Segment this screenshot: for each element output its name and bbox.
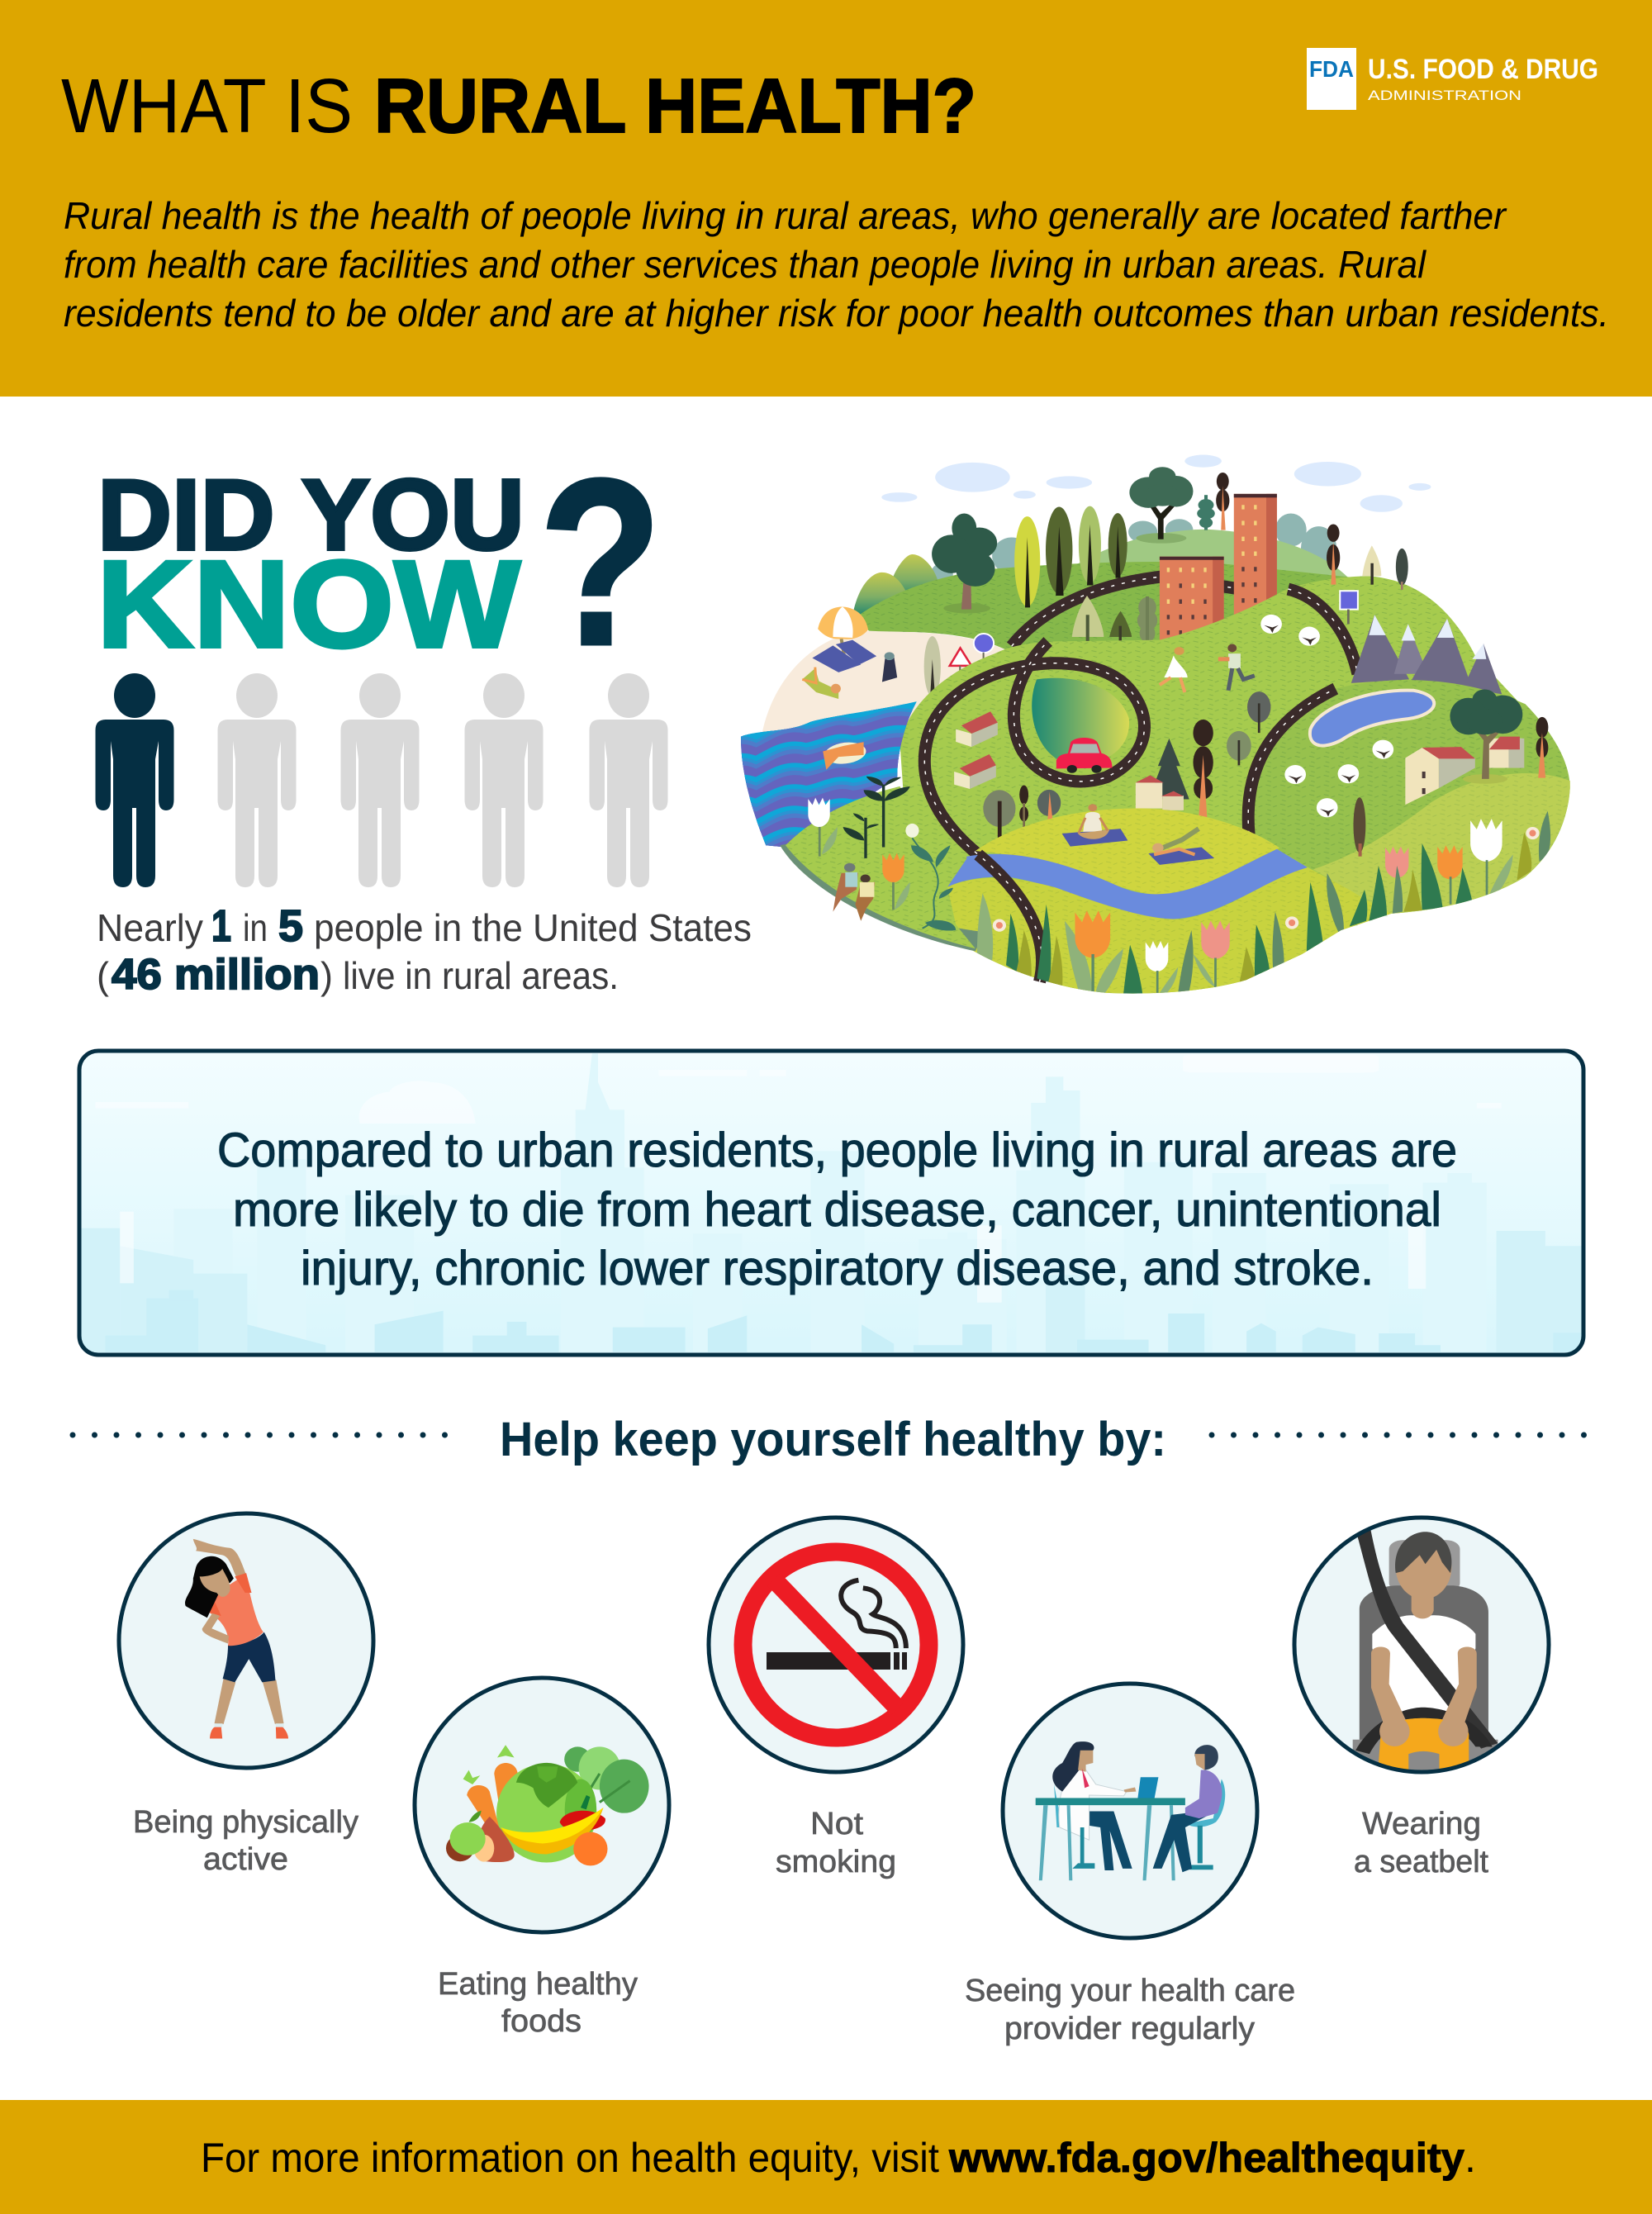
statistic text: 1 [211, 901, 231, 951]
label: smoking [776, 1845, 896, 1879]
road over meadow [978, 854, 1042, 981]
pond hill [1243, 680, 1570, 870]
intro paragraph: from health care facilities and other services than people living in urban areas. Rural [64, 243, 1427, 286]
upper trees [932, 467, 1229, 613]
footer band [0, 2100, 1652, 2214]
callout panel [78, 1049, 1585, 1356]
umbrella and towels [802, 606, 897, 699]
illustration: rural landscape [715, 455, 1570, 996]
statistic text: 5 [278, 901, 303, 951]
hill mounds [852, 554, 939, 616]
label: Not [810, 1807, 863, 1841]
footer text: . [1464, 2135, 1476, 2181]
footer text: For more information on health equity, visit [201, 2135, 939, 2181]
left plants and flowers [808, 777, 956, 931]
FDA logo: FDA [1309, 56, 1354, 82]
road to pond hill [1248, 689, 1336, 834]
FDA logo: U.S. FOOD & DRUG [1368, 54, 1598, 85]
right road and top-right trees [1288, 524, 1408, 674]
pictogram: 1 in 5 people [96, 673, 667, 887]
mountains [1351, 615, 1502, 694]
central green hill [900, 576, 1570, 994]
icon: fruit and vegetables [446, 1745, 649, 1865]
intro paragraph: Rural health is the health of people living in rural areas, who generally are located farther [64, 194, 1507, 237]
foreground flowers and blades [977, 811, 1550, 996]
farmhouse by pine [1136, 775, 1184, 810]
sheep [1260, 615, 1393, 817]
statistic text: people in the United States [314, 906, 752, 949]
back hill [1067, 530, 1348, 592]
tip: being physically active [119, 1513, 373, 1877]
label: Eating healthy [438, 1967, 638, 2002]
pale tree and road signs on beach [924, 634, 994, 698]
callout text: more likely to die from heart disease, cancer, unintentional [233, 1183, 1441, 1237]
callout text: injury, chronic lower respiratory disease, and stroke. [301, 1242, 1374, 1295]
beach [762, 630, 1006, 737]
right houses and trees [1353, 689, 1548, 857]
pond [1310, 691, 1434, 745]
intro paragraph: residents tend to be older and are at higher risk for poor health outcomes than urban residents. [64, 292, 1609, 335]
running couple [1160, 644, 1255, 692]
section heading with dotted rules: Help keep yourself healthy by: [500, 1413, 1166, 1466]
label: foods [501, 2004, 582, 2039]
label [1354, 1807, 1488, 1879]
label: provider regularly [1004, 2012, 1255, 2046]
footer text: www.fda.gov/healthequity [948, 2135, 1464, 2181]
callout text: Compared to urban residents, people living in rural areas are [217, 1124, 1457, 1177]
did you know heading: KNOW [97, 534, 520, 673]
tip: eating healthy foods [415, 1678, 669, 2039]
label: Wearing [1362, 1807, 1481, 1841]
car [1056, 738, 1112, 773]
mid-hill trees [983, 691, 1270, 848]
pit in road loop [1032, 678, 1129, 763]
bottom-left hill [780, 786, 984, 951]
label [133, 1805, 358, 1877]
label: Seeing your health care [965, 1974, 1295, 2008]
back bushes [931, 514, 1336, 586]
skyline backdrop [81, 1053, 1584, 1355]
foreground meadow [947, 867, 1391, 994]
tip: wearing a seatbelt [1294, 1518, 1549, 1879]
icon: stretching woman [185, 1539, 288, 1738]
tall buildings [1160, 494, 1277, 641]
water [740, 701, 917, 847]
title: RURAL HEALTH? [374, 63, 976, 149]
yoga hill [976, 808, 1279, 897]
statistic text: in [243, 906, 268, 949]
label [965, 1974, 1295, 2046]
right lower hill [1313, 773, 1570, 914]
FDA logo: ADMINISTRATION [1368, 88, 1521, 103]
statistic text: Nearly [97, 906, 203, 949]
clouds [881, 455, 1431, 512]
statistic text: ( [97, 954, 110, 997]
did you know heading: ? [539, 430, 662, 696]
statistic text [97, 901, 752, 999]
callout text [217, 1124, 1457, 1295]
did you know heading: DID YOU [97, 458, 525, 571]
icon: doctor and patient at table [1036, 1741, 1225, 1880]
label: active [203, 1842, 288, 1877]
header band [0, 0, 1652, 397]
label: Being physically [133, 1805, 358, 1840]
tip: seeing your health care provider [965, 1684, 1295, 2046]
small pines on upper hill [1072, 596, 1157, 648]
upper green hill [854, 562, 1358, 650]
statistic text: 46 million [112, 951, 320, 999]
icon: no smoking sign [743, 1551, 928, 1738]
statistic text: ) [320, 954, 333, 997]
did you know heading [97, 430, 662, 696]
label [438, 1967, 638, 2039]
tip: not smoking [709, 1518, 963, 1879]
yoga people [1062, 804, 1214, 865]
river [947, 849, 1308, 919]
label [776, 1807, 896, 1879]
intro paragraph [64, 194, 1609, 335]
upper road [1012, 577, 1241, 646]
icon: driver with seatbelt [1353, 1529, 1498, 1774]
title: WHAT IS [61, 63, 353, 149]
statistic text: live in rural areas. [343, 954, 619, 997]
title [61, 63, 976, 149]
houses on central hill [954, 711, 998, 789]
FDA logo [1307, 48, 1598, 110]
label: a seatbelt [1354, 1845, 1488, 1879]
main looping road [924, 641, 1144, 981]
footer text [201, 2135, 1476, 2181]
